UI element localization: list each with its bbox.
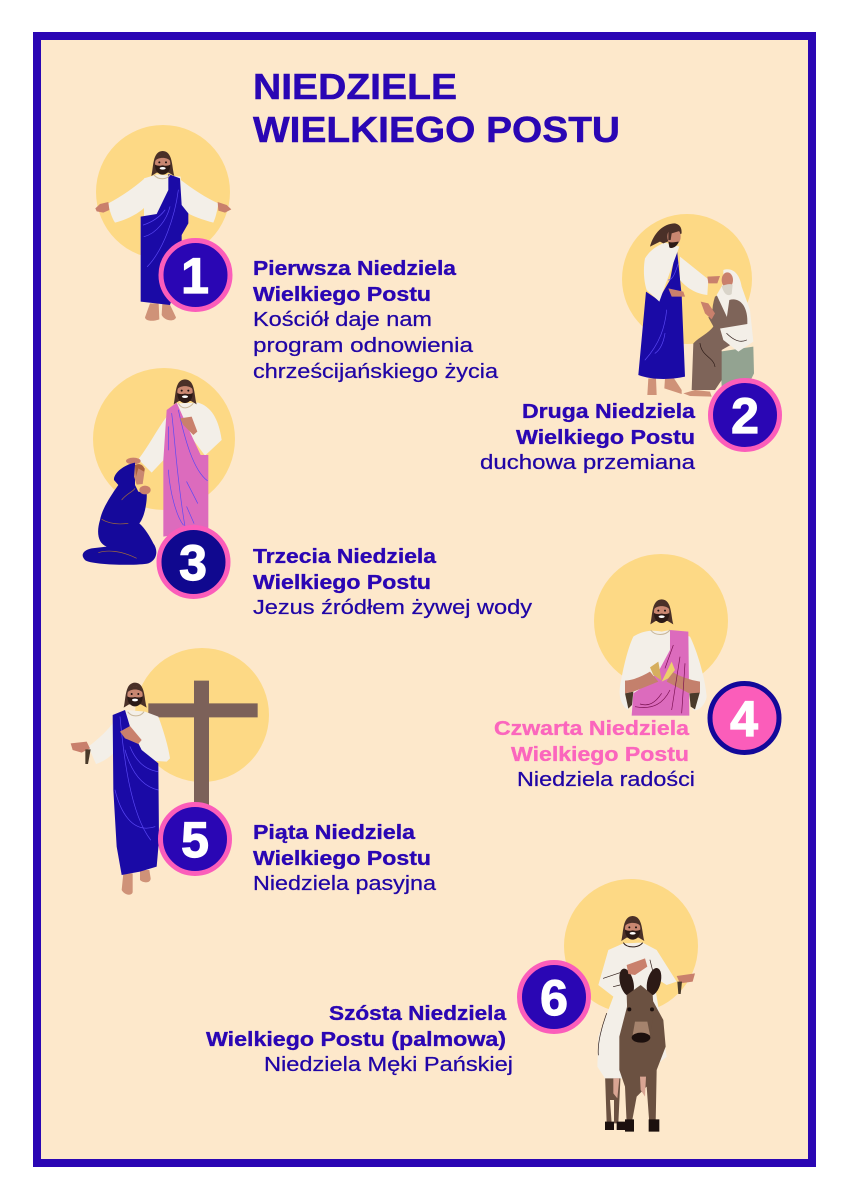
number badge 4 — [710, 684, 779, 752]
panel: sixth Sunday — [206, 879, 698, 1132]
text block 1: chrześcijańskiego życia — [253, 361, 499, 383]
text block 4: Niedziela radości — [517, 769, 695, 791]
illustration: Jesus holding bread — [620, 599, 707, 716]
text block 1: Wielkiego Postu — [253, 284, 431, 306]
illustration: Jesus with open arms — [95, 151, 231, 321]
title: WIELKIEGO POSTU — [253, 109, 620, 150]
panel: fourth Sunday — [494, 554, 779, 791]
icon: sun disc 2 — [622, 214, 752, 344]
text block 4: Wielkiego Postu — [511, 744, 689, 766]
text block 1: program odnowienia — [253, 335, 474, 357]
number badge 1: 1 — [181, 248, 209, 304]
number badge 5: 5 — [181, 812, 209, 868]
text block 1: Pierwsza Niedziela — [253, 258, 457, 280]
text block 1 — [253, 258, 499, 383]
icon: sun disc 5 — [135, 648, 269, 782]
text block 2: duchowa przemiana — [480, 452, 696, 474]
icon: sun disc 4 — [594, 554, 728, 688]
illustration: Jesus beside a cross — [71, 681, 258, 895]
text block 5 — [253, 822, 437, 895]
text block 3: Wielkiego Postu — [253, 572, 431, 594]
illustration: Jesus with kneeling woman — [83, 379, 222, 565]
panel: first Sunday — [95, 125, 499, 383]
text block 3 — [253, 546, 532, 619]
text block 6 — [206, 1003, 513, 1076]
number badge 1 — [161, 240, 230, 310]
text block 1: Kościół daje nam — [253, 309, 432, 331]
title — [253, 66, 620, 150]
text block 2 — [480, 401, 696, 474]
icon: sun disc 3 — [93, 368, 235, 510]
icon: sun disc 1 — [96, 125, 230, 259]
text block 6: Wielkiego Postu (palmowa) — [206, 1029, 506, 1051]
number badge 6 — [520, 962, 588, 1032]
text block 3: Jezus źródłem żywej wody — [253, 597, 532, 619]
panel: third Sunday — [83, 368, 532, 619]
text block 5: Wielkiego Postu — [253, 848, 431, 870]
number badge 2 — [710, 380, 780, 450]
text block 3: Trzecia Niedziela — [253, 546, 437, 568]
icon: sun disc 6 — [564, 879, 698, 1013]
illustration: Jesus healing a blind man — [638, 223, 754, 397]
number badge 3 — [159, 528, 228, 596]
cross — [148, 681, 258, 807]
text block 5: Piąta Niedziela — [253, 822, 416, 844]
text block 2: Druga Niedziela — [522, 401, 696, 423]
number badge 3: 3 — [179, 535, 207, 591]
text block 4 — [494, 718, 695, 791]
text block 2: Wielkiego Postu — [516, 427, 695, 449]
illustration: Jesus riding a donkey — [597, 916, 695, 1132]
number badge 2: 2 — [731, 388, 759, 444]
text block 6: Szósta Niedziela — [329, 1003, 507, 1025]
title: NIEDZIELE — [253, 66, 457, 107]
number badge 4: 4 — [730, 691, 758, 747]
text block 4: Czwarta Niedziela — [494, 718, 690, 740]
text block 6: Niedziela Męki Pańskiej — [264, 1054, 513, 1076]
panel: fifth Sunday — [71, 648, 437, 895]
text block 5: Niedziela pasyjna — [253, 873, 437, 895]
number badge 5 — [160, 804, 230, 874]
panel: second Sunday — [480, 214, 780, 474]
number badge 6: 6 — [540, 970, 568, 1026]
